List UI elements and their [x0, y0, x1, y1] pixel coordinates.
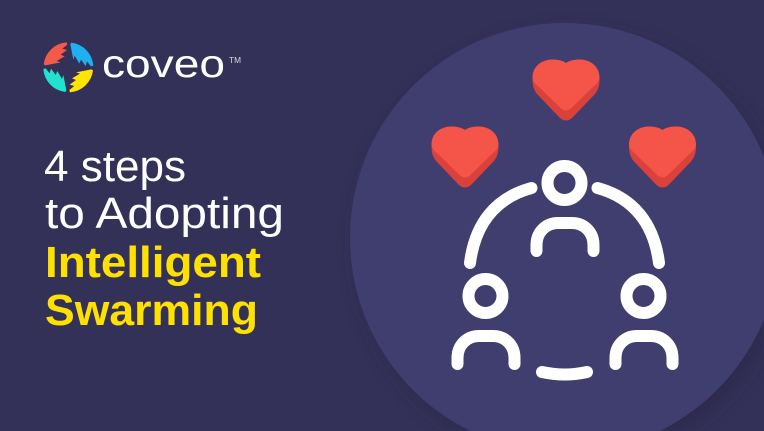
arc: bottom connector — [542, 372, 587, 374]
title line: Intelligent: Intelligent — [45, 238, 261, 287]
title line: 4 steps: 4 steps — [44, 142, 186, 191]
logo: coveo — [43, 42, 241, 92]
panel: circle with team illustration — [350, 23, 764, 431]
icon: right person — [616, 279, 672, 364]
icon: top heart — [532, 60, 600, 120]
icon: left person — [458, 279, 514, 364]
trademark: TM — [229, 56, 241, 65]
title line: to Adopting: to Adopting — [45, 189, 284, 238]
icon: right heart — [629, 126, 696, 188]
icon: top person — [536, 166, 594, 251]
arc: right connector — [598, 188, 659, 263]
title line: Swarming: Swarming — [45, 286, 258, 335]
arc: left connector — [470, 188, 532, 263]
icon: coveo mark — [43, 42, 93, 92]
title — [44, 142, 284, 335]
wordmark: coveo — [102, 43, 225, 86]
icon: left heart — [432, 126, 498, 188]
